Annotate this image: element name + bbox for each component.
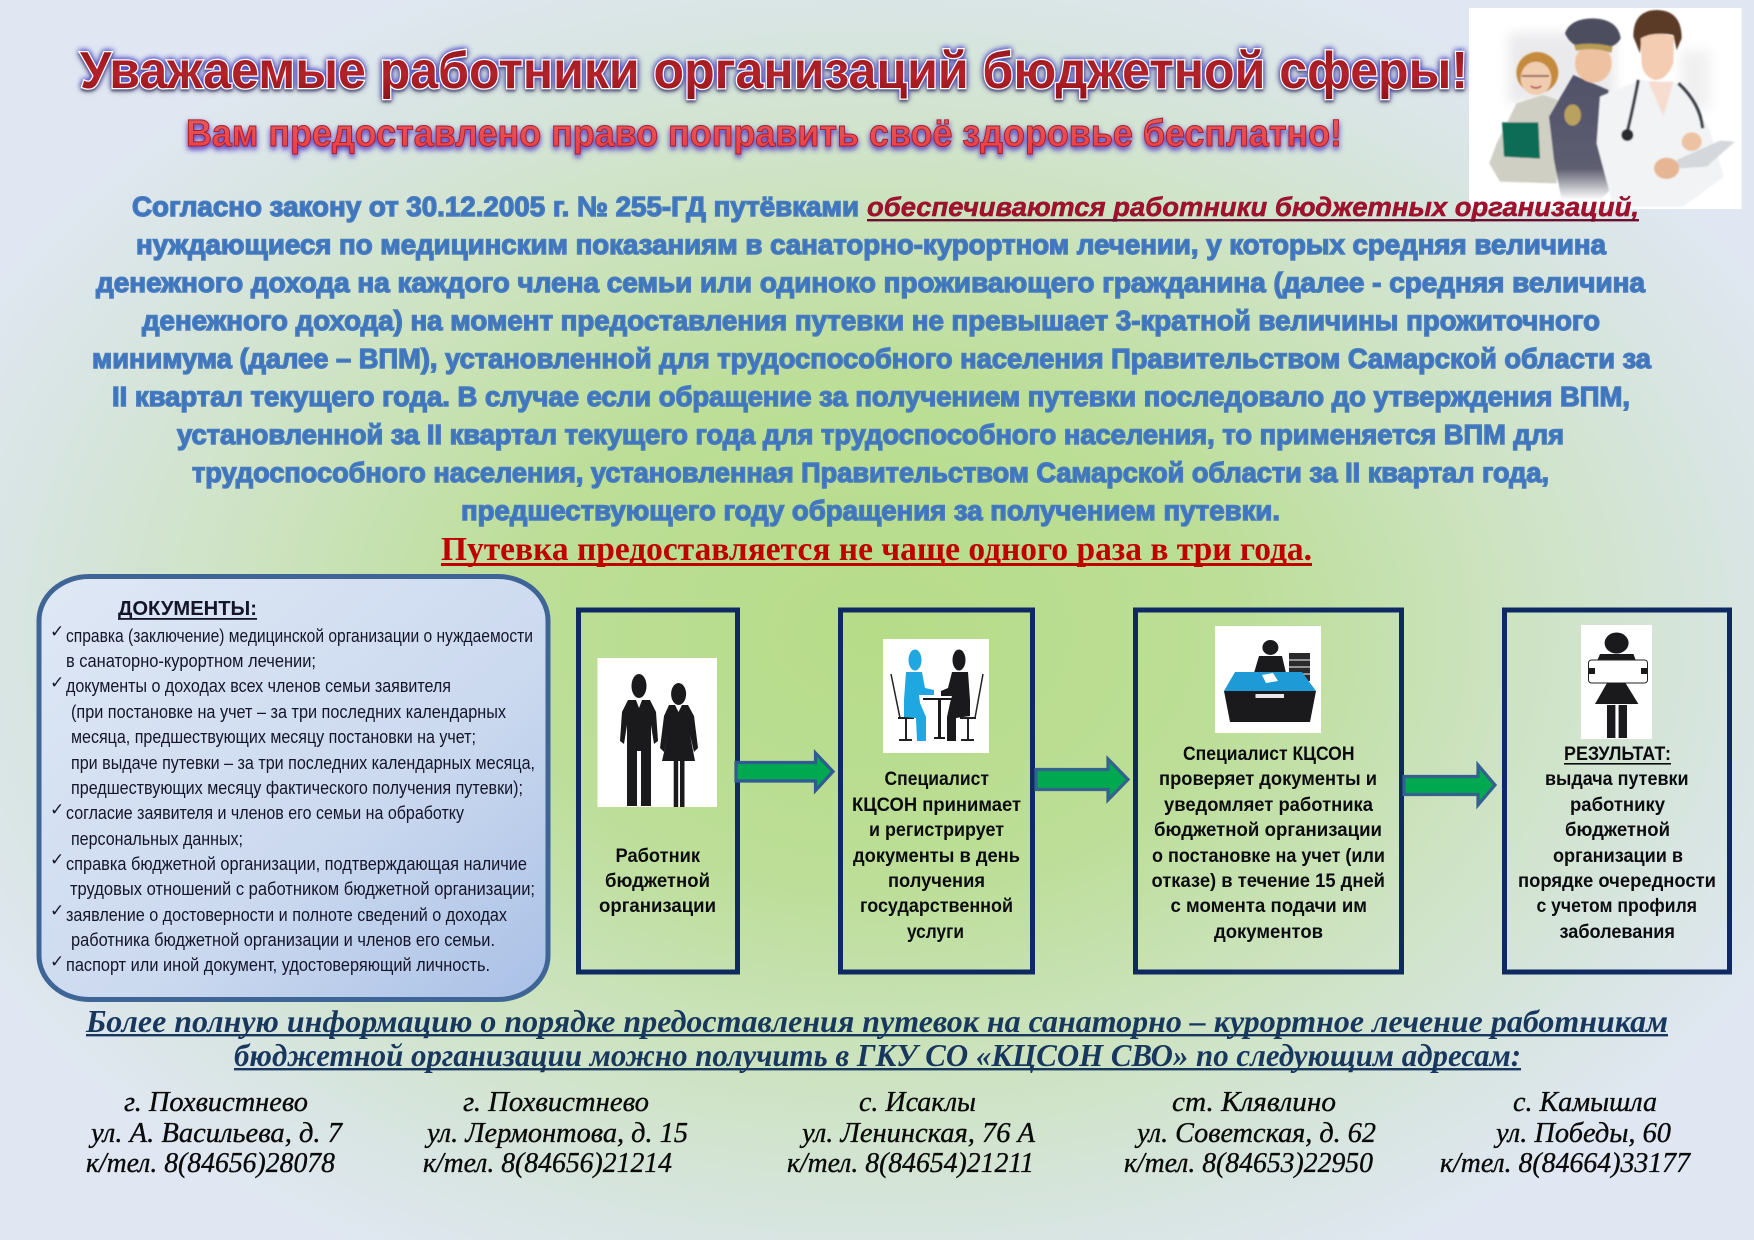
step text: с момента подачи им xyxy=(1170,896,1367,917)
step text: получения xyxy=(888,871,985,892)
documents list: ✓ xyxy=(50,622,64,642)
step text xyxy=(599,846,716,917)
step text: бюджетной организации xyxy=(1154,820,1382,841)
address: Klyavlino: к/тел. 8(84653)22950 xyxy=(1124,1148,1373,1179)
law text block: предшествующего году обращения за получением путевки. xyxy=(461,495,1280,526)
address: Pokhvistnevo, Vasilyeva: к/тел. 8(84656)28078 xyxy=(86,1148,335,1179)
step text xyxy=(1518,744,1716,943)
documents list: при выдаче путевки – за три последних календарных месяца, xyxy=(71,753,535,773)
highlighted phrase: обеспечиваются работники бюджетных организаций, xyxy=(867,192,1639,222)
step text: документы в день xyxy=(853,846,1020,867)
step text: с учетом профиля xyxy=(1536,896,1697,917)
icon: employees xyxy=(598,658,717,807)
step 3: specialist checks xyxy=(1136,610,1402,972)
step text xyxy=(852,769,1021,943)
step 1: employee xyxy=(578,610,738,972)
address: Pokhvistnevo, Vasilyeva xyxy=(86,1087,343,1179)
address: Pokhvistnevo, Lermontova xyxy=(423,1087,688,1179)
photo: teacher, police officer and doctor xyxy=(1469,8,1742,209)
law text block: Согласно закону от 30.12.2005 г. № 255-ГД путёвками xyxy=(132,191,859,222)
law text block: установленной за II квартал текущего года для трудоспособного населения, то применяется ВПМ для xyxy=(177,419,1564,450)
step text: Работник xyxy=(616,846,700,867)
law text block: минимума (далее – ВПМ), установленной для трудоспособного населения Правительством Самарской области за xyxy=(92,343,1651,374)
documents list xyxy=(50,622,535,975)
step text: проверяет документы и xyxy=(1159,769,1377,790)
documents list: ✓ xyxy=(50,850,64,870)
documents list: предшествующих месяцу фактического получения путевки); xyxy=(71,778,523,798)
step text: уведомляет работника xyxy=(1164,795,1373,816)
icon: meeting at a table xyxy=(883,639,989,753)
red frequency notice: Путевка предоставляется не чаще одного раза в три года. xyxy=(441,531,1312,568)
step text: Специалист КЦСОН xyxy=(1183,744,1354,765)
icon: specialist at a desk xyxy=(1215,626,1321,733)
address: Klyavlino: ст. Клявлино xyxy=(1172,1087,1336,1118)
step text: и регистрирует xyxy=(869,820,1004,841)
step text xyxy=(1152,744,1385,943)
address: Pokhvistnevo, Lermontova: к/тел. 8(84656)21214 xyxy=(423,1148,672,1179)
address: Pokhvistnevo, Lermontova: ул. Лермонтова, д. 15 xyxy=(424,1118,688,1149)
address: Pokhvistnevo, Vasilyeva: г. Похвистнево xyxy=(124,1087,308,1118)
panel: documents xyxy=(39,576,548,1000)
step text: выдача путевки xyxy=(1545,769,1688,790)
step text: организации в xyxy=(1553,846,1683,867)
address: Klyavlino: ул. Советская, д. 62 xyxy=(1134,1118,1376,1149)
documents list: в санаторно-курортном лечении; xyxy=(66,651,316,671)
address: Pokhvistnevo, Lermontova: г. Похвистнево xyxy=(463,1087,649,1118)
step text: работнику xyxy=(1570,795,1665,816)
step text: порядке очередности xyxy=(1518,871,1716,892)
address: Kamyshla: к/тел. 8(84664)33177 xyxy=(1440,1148,1691,1179)
more information heading xyxy=(85,1003,1668,1073)
address: Pokhvistnevo, Vasilyeva: ул. А. Васильева, д. 7 xyxy=(88,1118,343,1149)
address: Kamyshla: с. Камышла xyxy=(1513,1087,1657,1118)
address: Isakly: с. Исаклы xyxy=(859,1087,976,1118)
documents list: ✓ xyxy=(50,952,64,972)
step text: о постановке на учет (или xyxy=(1152,846,1385,867)
law text block: денежного дохода на каждого члена семьи или одиноко проживающего гражданина (далее - средняя величина xyxy=(96,267,1645,298)
step text: бюджетной xyxy=(1565,820,1670,841)
address: Isakly: ул. Ленинская, 76 А xyxy=(799,1118,1036,1149)
step 2: specialist receives xyxy=(840,610,1032,972)
more information heading: Более полную информацию о порядке предоставления путевок на санаторно – курортное лечение работникам xyxy=(85,1003,1668,1039)
law text block: денежного дохода) на момент предоставления путевки не превышает 3-кратной величины прожиточного xyxy=(142,305,1600,336)
address: Klyavlino xyxy=(1124,1087,1376,1179)
law text block: трудоспособного населения, установленная Правительством Самарской области за II квартал года, xyxy=(192,457,1549,488)
law text block: II квартал текущего года. В случае если обращение за получением путевки последовало до утверждения ВПМ, xyxy=(112,381,1630,412)
documents list: работника бюджетной организации и членов его семьи. xyxy=(71,930,495,950)
address: Isakly xyxy=(787,1087,1036,1179)
more information heading: бюджетной организации можно получить в ГКУ СО «КЦСОН СВО» по следующим адресам: xyxy=(234,1037,1521,1073)
arrow 2 xyxy=(1036,759,1128,800)
step text: Специалист xyxy=(884,769,989,790)
documents list: справка (заключение) медицинской организации о нуждаемости xyxy=(66,626,533,646)
documents list: персональных данных; xyxy=(71,829,243,849)
documents list: документы о доходах всех членов семьи заявителя xyxy=(66,676,451,696)
step text: РЕЗУЛЬТАТ: xyxy=(1564,744,1671,765)
step text: КЦСОН принимает xyxy=(852,795,1021,816)
address: Kamyshla: ул. Победы, 60 xyxy=(1493,1118,1671,1149)
documents list: трудовых отношений с работником бюджетной организации; xyxy=(70,879,535,899)
address: Isakly: к/тел. 8(84654)21211 xyxy=(787,1148,1034,1179)
subtitle: Вам предоставлено право поправить своё здоровье бесплатно! xyxy=(186,113,1342,155)
documents list: месяца, предшествующих месяцу постановки на учет; xyxy=(71,727,476,747)
documents list: (при постановке на учет – за три последних календарных xyxy=(71,702,506,722)
documents list: ✓ xyxy=(50,901,64,921)
documents list: ✓ xyxy=(50,673,64,693)
step text: документов xyxy=(1214,922,1323,943)
documents list: паспорт или иной документ, удостоверяющий личность. xyxy=(66,955,490,975)
arrow 1 xyxy=(736,753,833,790)
step text: заболевания xyxy=(1560,922,1675,943)
title: Уважаемые работники организаций бюджетной сферы! xyxy=(80,42,1468,100)
step text: услуги xyxy=(907,922,964,943)
step text: организации xyxy=(599,896,716,917)
arrow 3 xyxy=(1404,765,1495,805)
documents list: справка бюджетной организации, подтверждающая наличие xyxy=(66,854,527,874)
step text: отказе) в течение 15 дней xyxy=(1152,871,1385,892)
documents list: ✓ xyxy=(50,800,64,820)
step 4: result xyxy=(1504,610,1730,972)
step text: государственной xyxy=(860,896,1013,917)
step text: бюджетной xyxy=(605,871,710,892)
address: Kamyshla xyxy=(1440,1087,1691,1179)
documents list: согласие заявителя и членов его семьи на обработку xyxy=(66,803,464,823)
law text block: нуждающиеся по медицинским показаниям в санаторно-курортном лечении, у которых средняя величина xyxy=(136,229,1606,260)
documents heading: ДОКУМЕНТЫ: xyxy=(118,598,257,620)
icon: person holding a voucher xyxy=(1581,625,1652,739)
documents list: заявление о достоверности и полноте сведений о доходах xyxy=(66,905,507,925)
law text block xyxy=(92,191,1651,526)
